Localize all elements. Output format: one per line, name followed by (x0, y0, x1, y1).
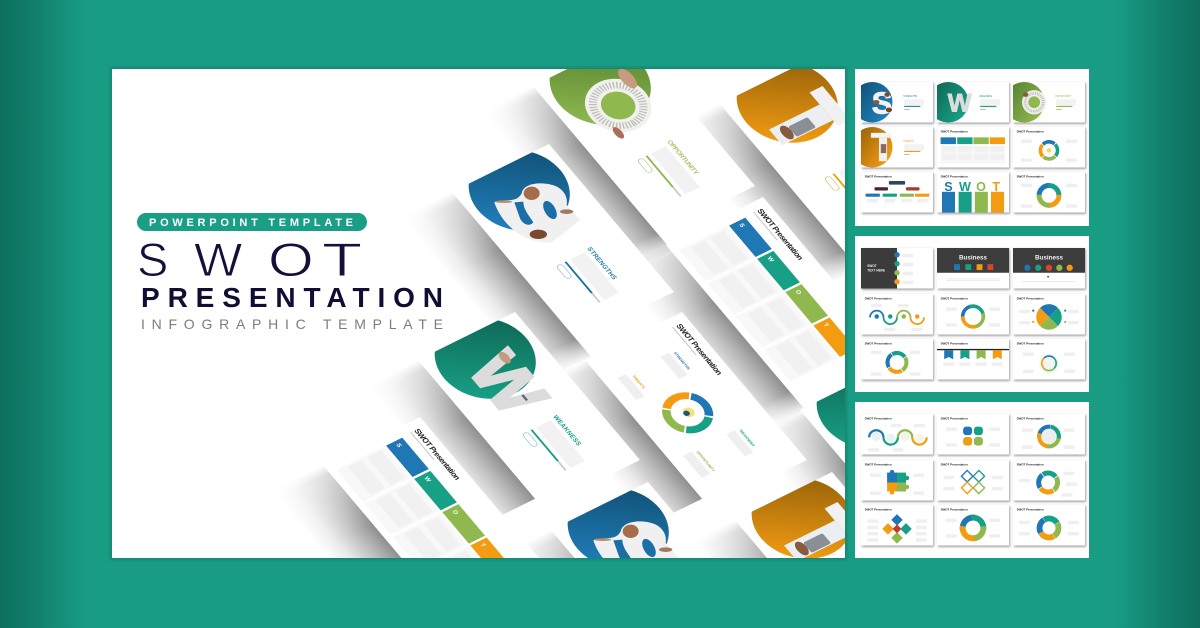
thumb: strengths: STRENGTHS (903, 96, 918, 98)
thumb: table (937, 127, 1009, 168)
thumb: business circles: Business (1035, 254, 1063, 261)
title: SWOT: T (322, 234, 362, 287)
slide: SWOT table upper: SWOT Presentation (755, 207, 805, 262)
slide: SWOT table lower: S (394, 443, 402, 449)
thumb: donut: SWOT Presentation (1017, 129, 1044, 133)
thumb: dark list: SWOT (867, 264, 877, 268)
slide: SWOT table upper: O (793, 289, 802, 296)
thumb: org chart (861, 172, 933, 212)
thumb: wave (861, 294, 933, 334)
thumb: thin ring: SWOT Presentation (1017, 341, 1044, 345)
thumb: donut (1013, 127, 1085, 168)
slide: strengths repeat (558, 482, 678, 558)
slide: donut diagram: SWOT Presentation (674, 322, 724, 377)
panel: thumbnails top (852, 69, 1089, 226)
slide: donut diagram: OPPORTUNITY (695, 451, 716, 473)
slide: weakness repeat (800, 388, 845, 464)
thumb: diamonds filled (861, 505, 933, 546)
slide: SWOT table upper: T (822, 323, 829, 328)
title: SWOT: O (268, 234, 314, 287)
thumb: segmented donut (937, 294, 1009, 334)
title: SWOT (137, 233, 362, 287)
thumb: SWOT tags: SWOT Presentation (941, 174, 968, 178)
thumb: threats (861, 127, 933, 168)
thumb: weakness (937, 82, 1009, 122)
slide: SWOT table lower: T (479, 543, 486, 548)
thumb: business squares (937, 248, 1009, 288)
thumb: opportunity (1013, 82, 1085, 122)
slide: threats: THREATS (852, 157, 878, 183)
thumb: arrow circle: SWOT Presentation (1017, 416, 1044, 420)
slide: strengths (460, 144, 674, 340)
thumb: weakness: W (948, 90, 972, 118)
thumb: puzzle (861, 460, 933, 500)
thumb: strengths: S (872, 87, 892, 121)
title: PRESENTATION: PRESENTATION (141, 282, 443, 313)
thumb: S wave (861, 414, 933, 454)
thumb: opportunity: OPPORTUNITY (1055, 96, 1072, 98)
thumb: dark list: TEXT HERE (867, 268, 885, 272)
thumb: diamonds outline: SWOT Presentation (941, 462, 968, 466)
thumb: large ring (937, 505, 1009, 546)
panel: main hero (112, 69, 845, 558)
panel: thumbnails bottom (855, 402, 1089, 558)
thumb: SWOT tags: T (992, 180, 1000, 194)
thumb: ring (1013, 172, 1085, 212)
thumb: wave: SWOT Presentation (865, 296, 892, 300)
thumb: org chart: SWOT Presentation (865, 174, 892, 178)
slide: strengths: STRENGTHS (585, 246, 618, 281)
thumb: business squares: Business (959, 254, 987, 261)
thumb: large ring: SWOT Presentation (941, 507, 968, 511)
slide: SWOT table lower: SWOT Presentation (412, 427, 462, 482)
thumb: dark list (861, 248, 933, 288)
thumb: ribbons (937, 339, 1009, 380)
slide: SWOT table lower: O (450, 509, 459, 516)
slide: SWOT table lower: W (422, 476, 432, 483)
thumb: blob ring (1013, 505, 1085, 546)
thumb: ring: SWOT Presentation (1017, 174, 1044, 178)
slide: donut diagram (585, 312, 807, 508)
slide: donut diagram: WEAKNESS (738, 429, 756, 447)
thumb: diamonds filled: SWOT Presentation (865, 507, 892, 511)
slide: weakness: W (451, 340, 564, 426)
thumb: business circles (1013, 248, 1085, 288)
slide: SWOT table upper: W (765, 256, 775, 263)
slide: SWOT table upper: S (737, 223, 745, 229)
slide: weakness: WEAKNESS (551, 414, 583, 448)
thumb: butterfly: SWOT Presentation (941, 416, 968, 420)
thumb: weakness: WEAKNESS (979, 95, 993, 98)
thumb: segmented donut: SWOT Presentation (941, 296, 968, 300)
badge: powerpoint template (137, 213, 367, 231)
slide: opportunity: OPPORTUNITY (665, 139, 700, 176)
thumb: pie (1013, 294, 1085, 334)
thumb: arrow ring (861, 339, 933, 380)
panel: thumbnails middle (855, 236, 1089, 392)
slide: SWOT table upper (666, 197, 845, 393)
slide: threats (728, 69, 845, 252)
title: SWOT: S (137, 233, 168, 286)
thumb: threats: THREATS (903, 140, 914, 143)
thumb: S wave: SWOT Presentation (865, 416, 892, 420)
thumb: SWOT tags: S (944, 180, 953, 194)
badge: powerpoint template: POWERPOINT TEMPLATE (149, 217, 353, 229)
thumb: ribbons: SWOT Presentation (941, 341, 968, 345)
thumb: butterfly (937, 414, 1009, 454)
thumb: diamonds outline (937, 460, 1009, 500)
slide: donut diagram: STRENGTHS (673, 351, 691, 371)
thumb: thin ring (1013, 339, 1085, 380)
thumb: blob ring: SWOT Presentation (1017, 507, 1044, 511)
thumb: puzzle: SWOT Presentation (865, 462, 892, 466)
thumb: arrow ring: SWOT Presentation (865, 341, 892, 345)
thumb: pie: SWOT Presentation (1017, 296, 1044, 300)
thumb: SWOT tags: O (976, 180, 986, 194)
thumb: puzzle ring (1013, 460, 1085, 500)
slide: threats repeat (742, 472, 845, 558)
slide: donut diagram: THREATS (631, 375, 646, 390)
thumb: table: SWOT Presentation (941, 129, 968, 133)
slide: SWOT table lower (330, 417, 539, 558)
isometric slide collage (296, 69, 1061, 558)
thumb: SWOT tags (937, 172, 1009, 212)
subtitle: INFOGRAPHIC TEMPLATE (141, 316, 443, 332)
thumb: arrow circle (1013, 414, 1085, 454)
title: SWOT: W (194, 234, 243, 287)
thumb: strengths (861, 82, 933, 122)
thumb: puzzle ring: SWOT Presentation (1017, 462, 1044, 466)
slide: opportunity (540, 69, 755, 234)
slide: weakness (426, 312, 640, 498)
thumb: SWOT tags: W (959, 180, 971, 194)
